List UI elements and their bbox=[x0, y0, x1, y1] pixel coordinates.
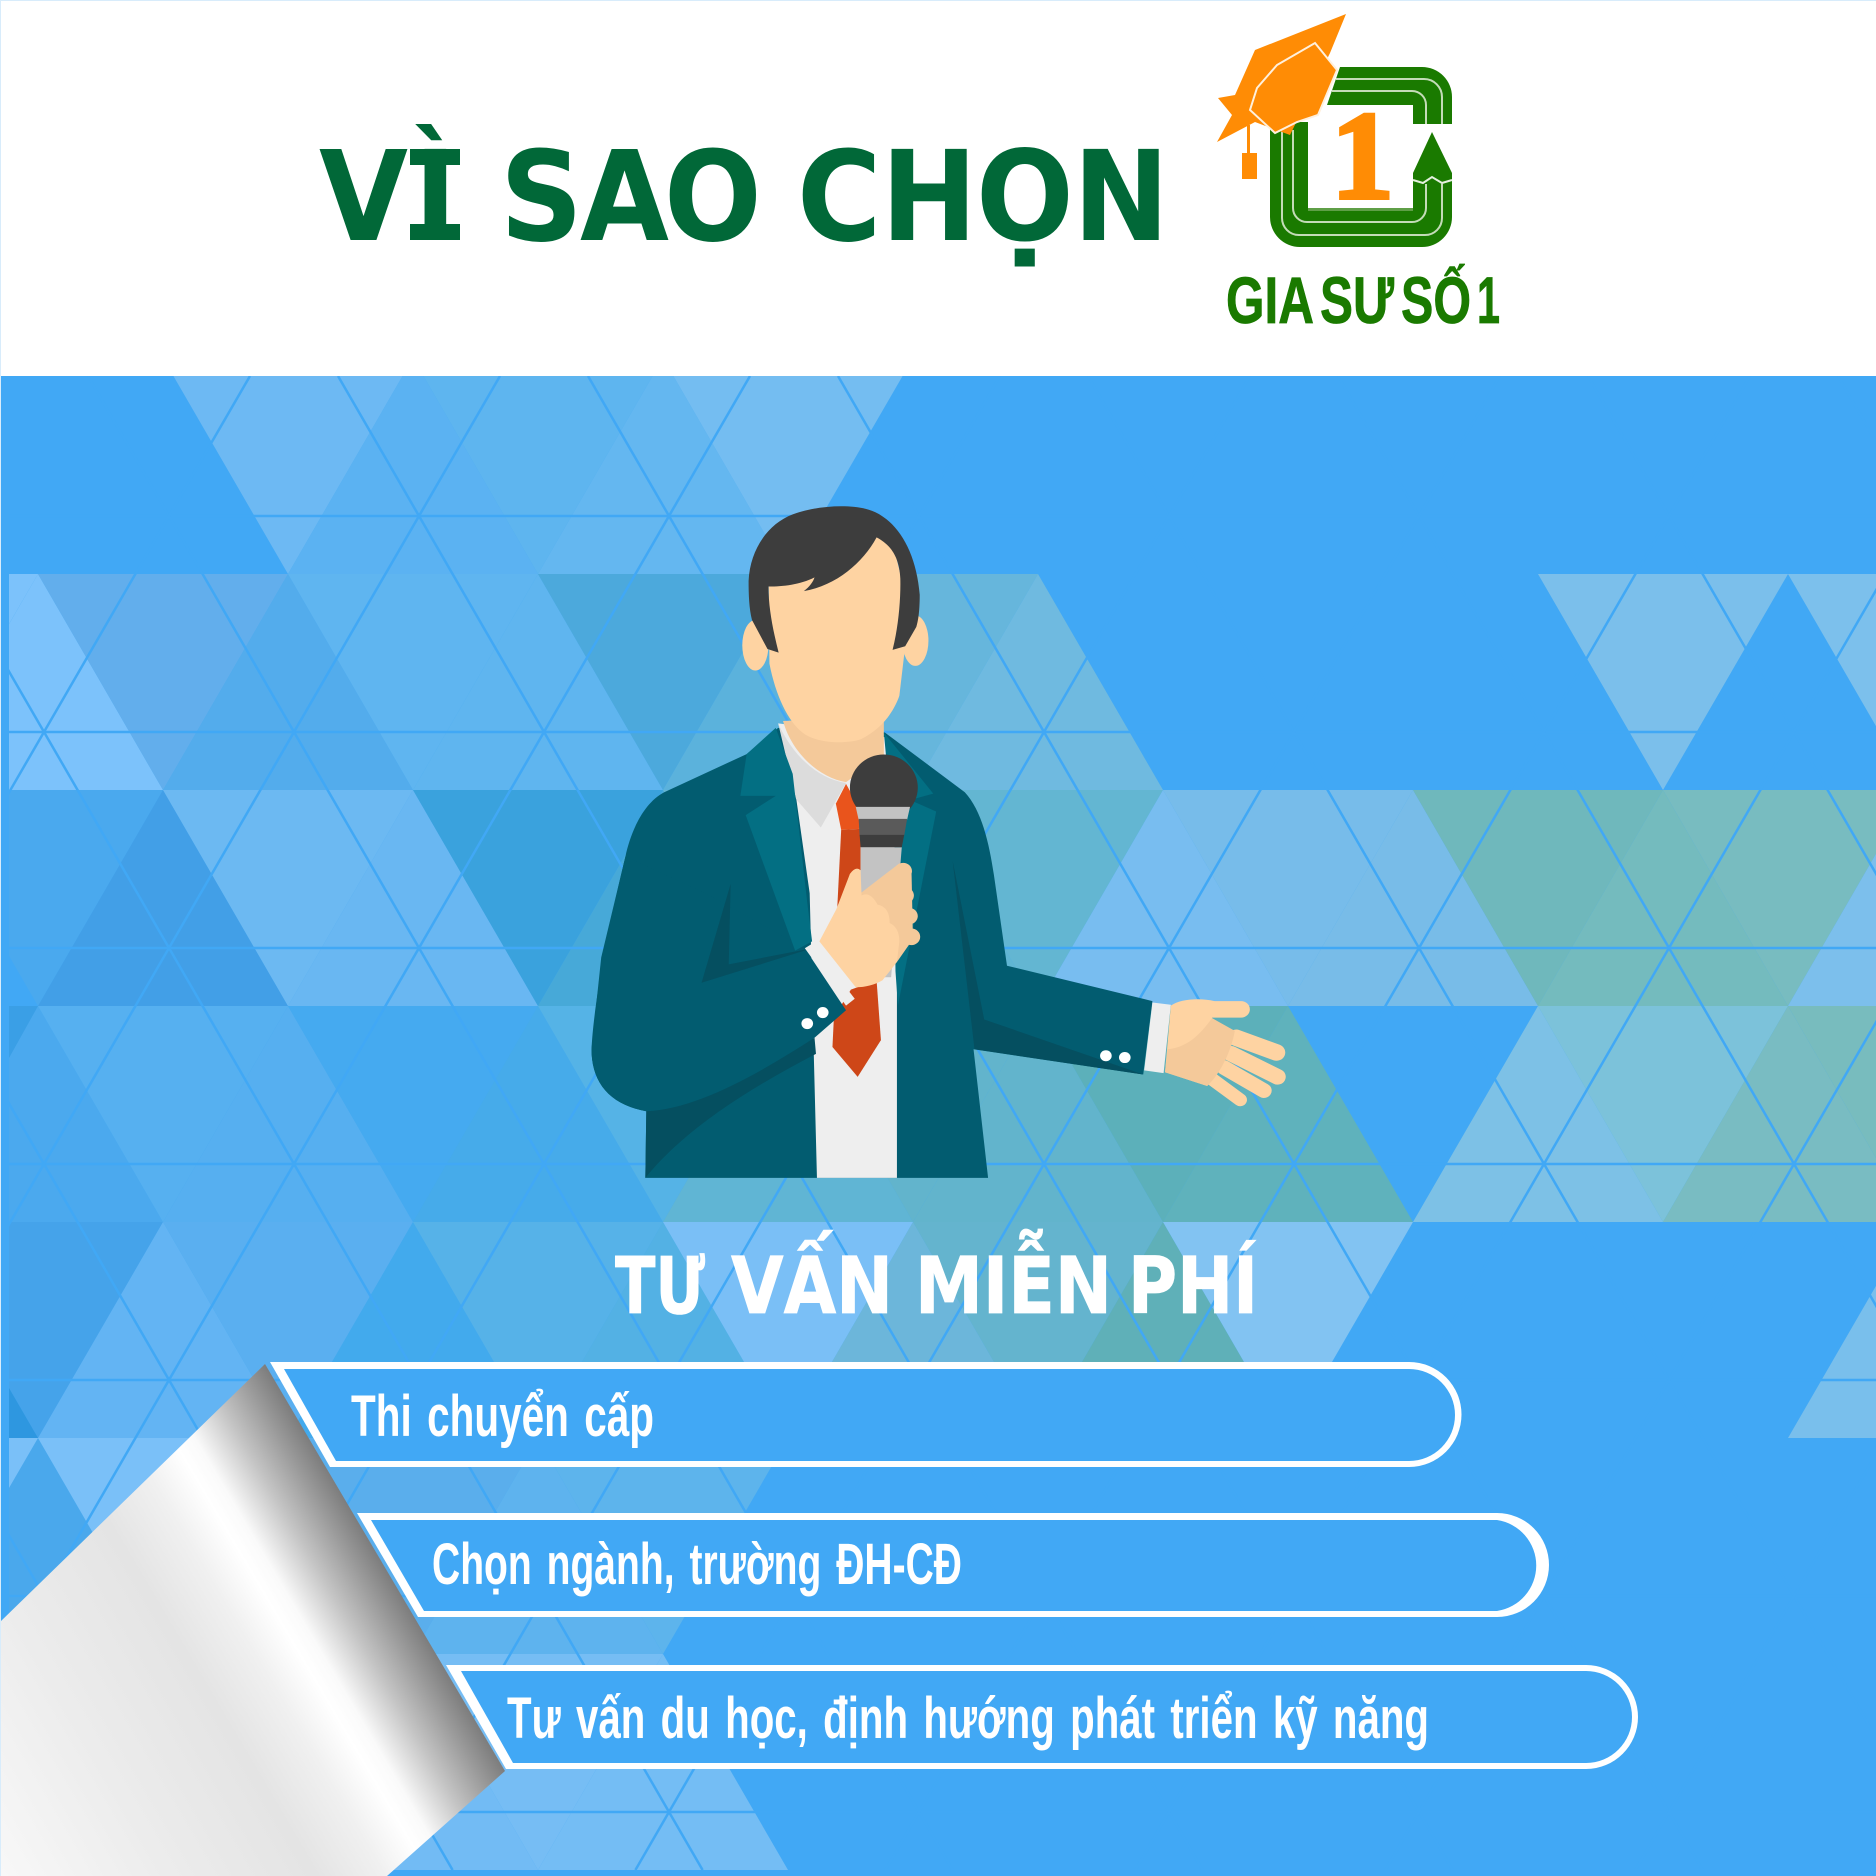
logo wordmark: GIA bbox=[1226, 263, 1314, 337]
blue background bbox=[0, 376, 1876, 1876]
list item 2 bbox=[357, 1513, 1549, 1617]
right hand bbox=[1165, 999, 1278, 1100]
title: VÌ SAO CHỌN bbox=[319, 124, 1169, 270]
face bbox=[768, 526, 907, 742]
logo numeral 1: 1 bbox=[1331, 87, 1394, 226]
logo wordmark bbox=[1226, 263, 1500, 337]
logo pencil tip bbox=[1413, 132, 1452, 183]
logo: Gia Su So 1 bbox=[1217, 14, 1500, 337]
logo wordmark: 1 bbox=[1477, 263, 1500, 337]
list item 3 bbox=[446, 1665, 1638, 1769]
left cuff bbox=[805, 944, 855, 1006]
list item 3: Tư vấn du học, định hướng phát triển kỹ năng bbox=[507, 1686, 1429, 1751]
presenter illustration bbox=[592, 506, 1278, 1178]
header background bbox=[0, 0, 1876, 376]
list item 1 bbox=[270, 1362, 1462, 1467]
heading: Tu van mien phi: VẤN bbox=[731, 1230, 893, 1332]
heading: Tu van mien phi bbox=[615, 1229, 1258, 1332]
shirt bbox=[778, 723, 909, 1178]
heading: Tu van mien phi: PHÍ bbox=[1128, 1240, 1258, 1332]
logo wordmark: SỐ bbox=[1401, 263, 1471, 337]
logo frame bbox=[1270, 67, 1452, 247]
neck bbox=[783, 716, 884, 782]
heading: Tu van mien phi: TƯ bbox=[615, 1242, 705, 1332]
tie bbox=[832, 784, 881, 1077]
page curl bbox=[0, 1364, 505, 1876]
logo wordmark: SƯ bbox=[1320, 263, 1394, 337]
microphone bbox=[850, 755, 918, 977]
left arm sleeve bbox=[592, 856, 846, 1111]
logo graduation cap bbox=[1217, 14, 1346, 179]
cuff buttons bbox=[801, 1007, 1131, 1063]
right cuff bbox=[1144, 1002, 1171, 1073]
jacket shadows bbox=[645, 861, 1143, 1178]
collar bbox=[778, 723, 846, 828]
list item 1: Thi chuyển cấp bbox=[351, 1384, 654, 1449]
jacket bbox=[592, 728, 1152, 1178]
lapels bbox=[740, 728, 936, 1006]
heading: Tu van mien phi: MIỄN bbox=[915, 1229, 1112, 1332]
ears bbox=[742, 615, 928, 671]
hair bbox=[749, 506, 920, 653]
left hand bbox=[819, 863, 920, 987]
list item 2: Chọn ngành, trường ĐH-CĐ bbox=[432, 1532, 962, 1597]
